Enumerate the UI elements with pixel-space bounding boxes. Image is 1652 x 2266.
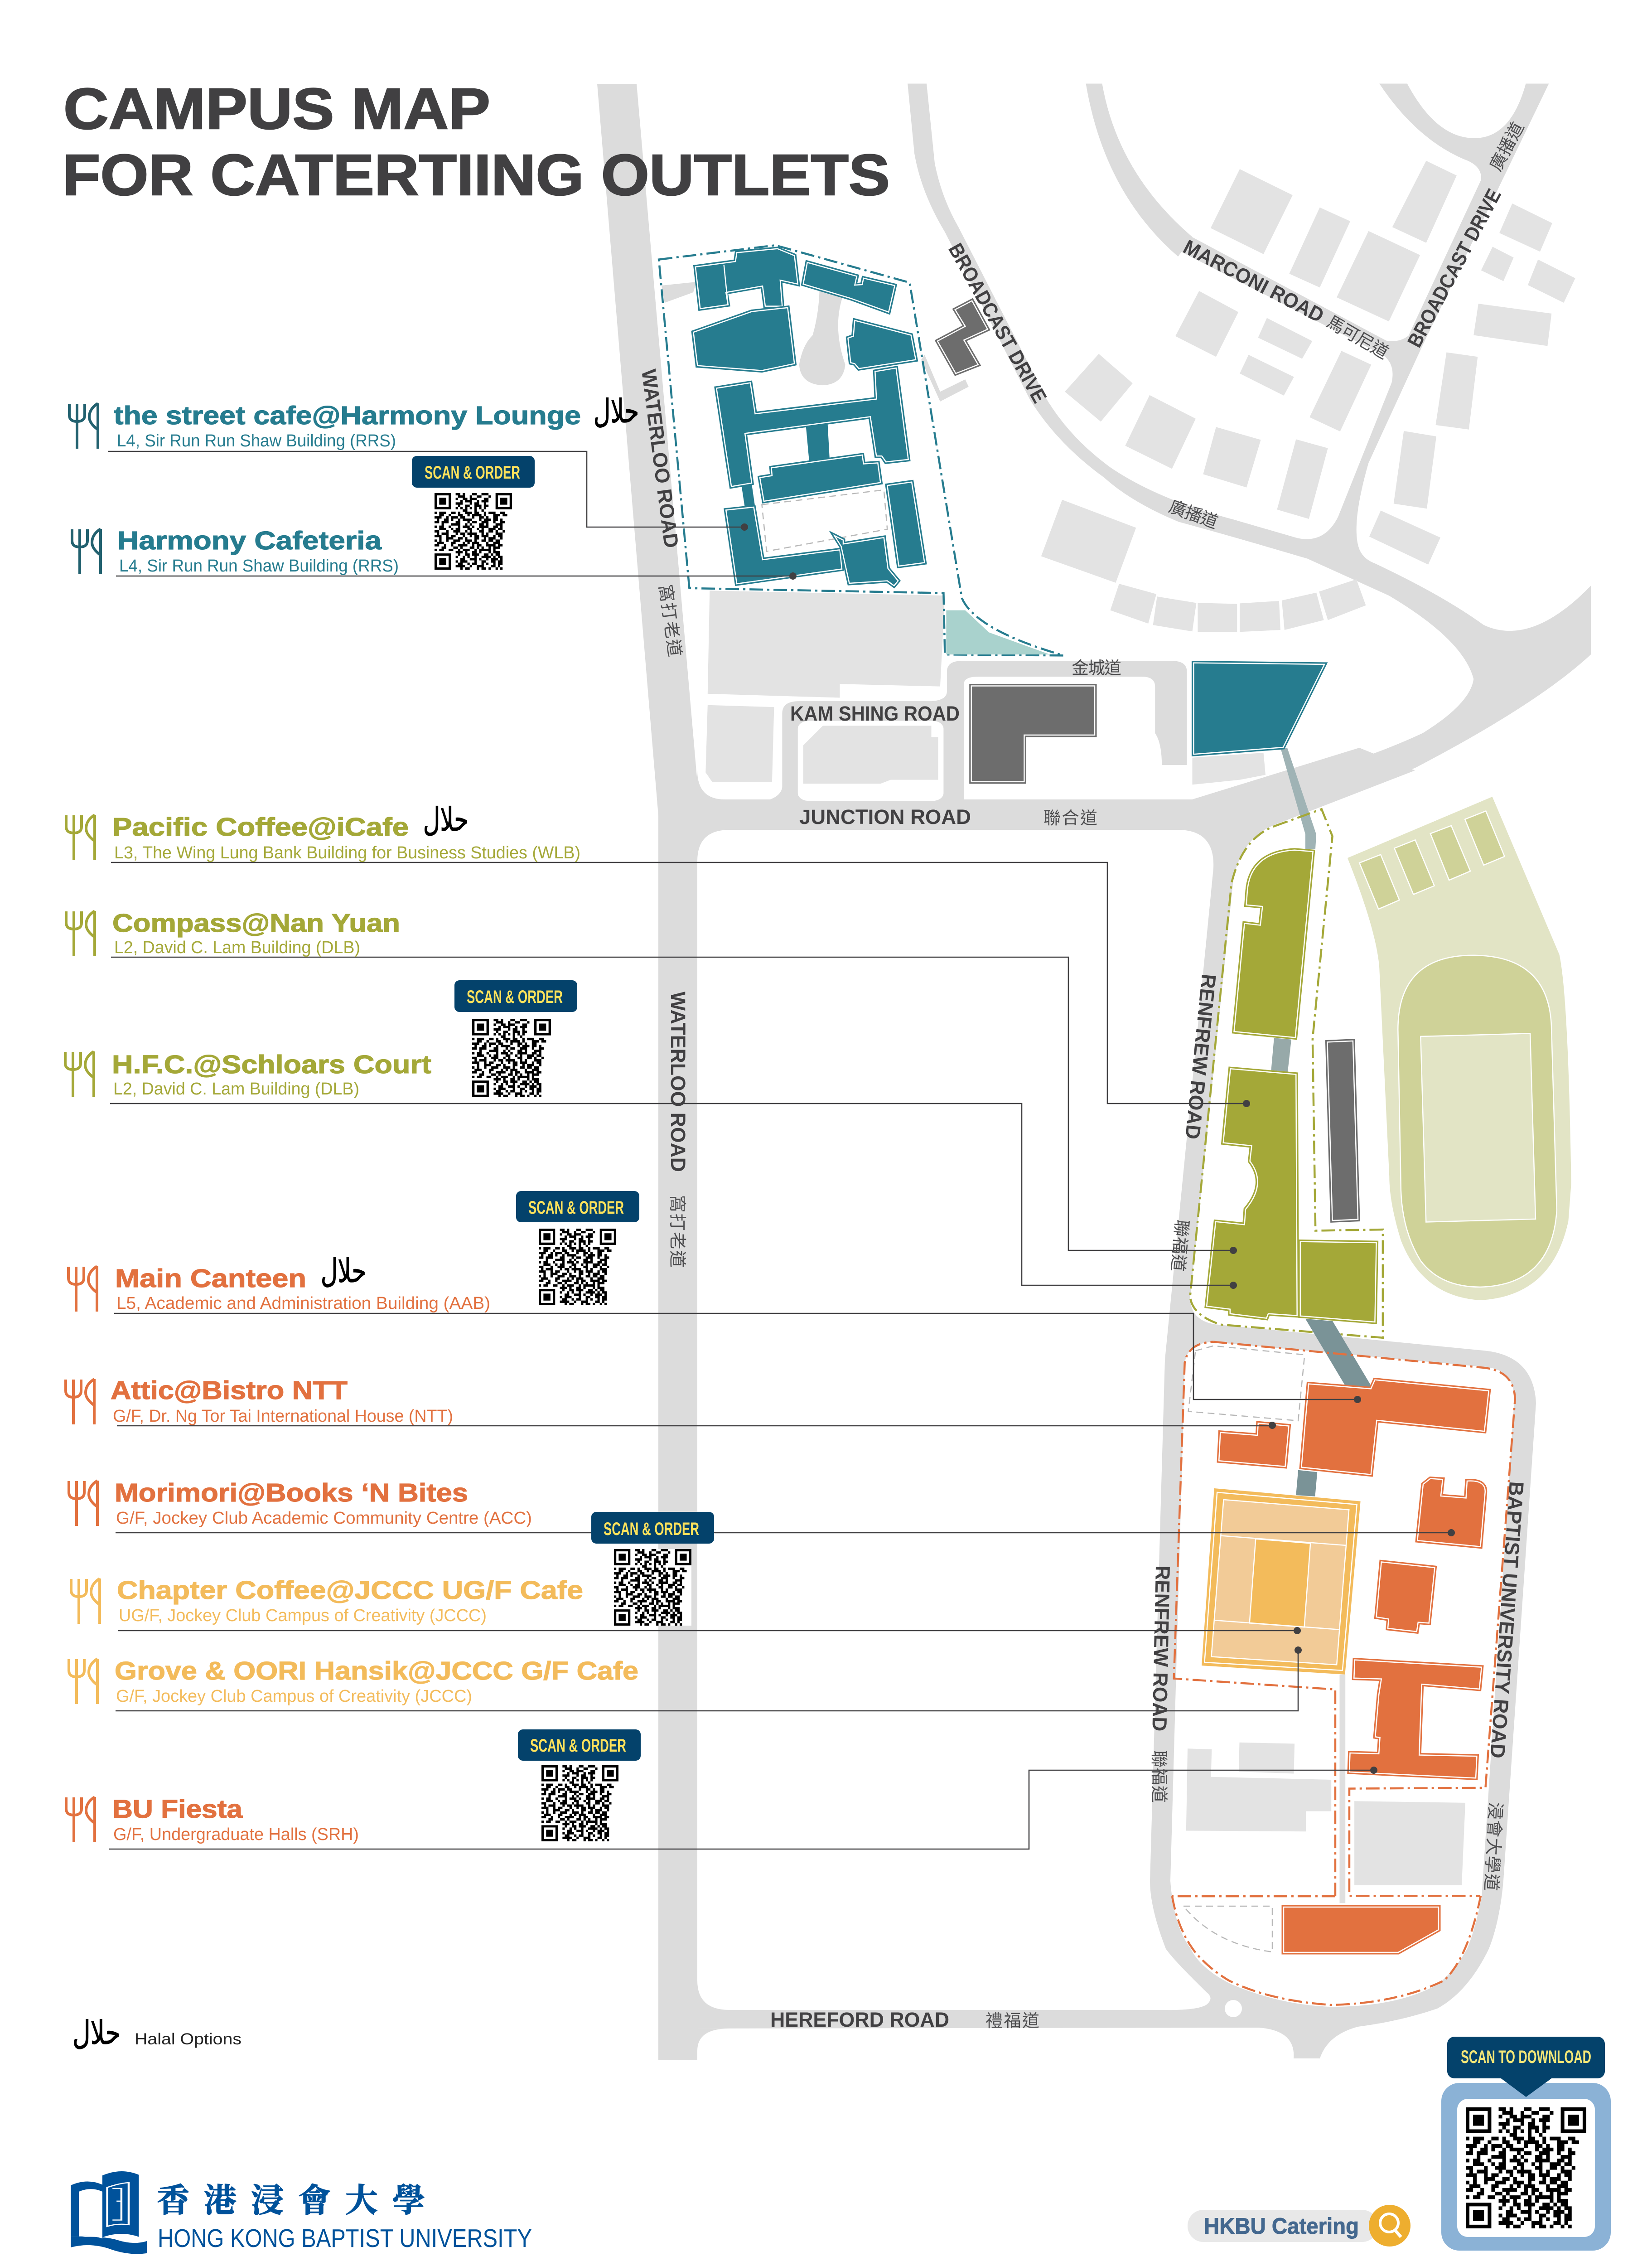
zone: south boundary and south building [1172, 1896, 1481, 2005]
road: corner fillets [697, 770, 729, 2051]
button text: SCAN & ORDER [528, 1198, 624, 1218]
zone boundary [1172, 1342, 1515, 1896]
outlet location: UG/F, Jockey Club Campus of Creativity (JCCC) [119, 1606, 487, 1625]
building: east bar [887, 482, 925, 566]
label: Marconi Road Chinese: 馬可尼道 [1323, 312, 1391, 363]
service lane [1339, 1675, 1345, 1903]
button [412, 456, 535, 488]
icon: fork and knife [69, 403, 98, 449]
outlet name: Harmony Cafeteria [117, 526, 382, 555]
outlet: Chapter Coffee@JCCC UG/F Cafe [71, 1576, 583, 1625]
icon: fork and knife [71, 1578, 100, 1624]
label: Renfrew Road lower Chinese: 聯福道 [1149, 1750, 1168, 1803]
outlet name: Grove & OORI Hansik@JCCC G/F Cafe [115, 1656, 638, 1685]
scan and order: Main Canteen [516, 1191, 639, 1305]
outlet name: Compass@Nan Yuan [112, 909, 400, 938]
leader lines and location dots [108, 451, 1455, 1849]
bridge [1271, 1038, 1291, 1072]
building: north wing [696, 249, 798, 309]
button text: SCAN & ORDER [530, 1736, 626, 1756]
road: Broadcast Drive and Marconi Road [705, 84, 1591, 809]
QR code [614, 1549, 691, 1626]
building: teal Communication block [1193, 663, 1324, 754]
label: Waterloo Road lower: WATERLOO ROAD [667, 992, 690, 1172]
outlet: Grove & OORI Hansik@JCCC G/F Cafe [69, 1656, 638, 1706]
label: Baptist University Road Chinese: 浸會大學道 [1481, 1802, 1505, 1891]
bridge [1296, 1470, 1317, 1496]
outlet: the street cafe@Harmony Lounge [69, 392, 639, 450]
road: Kam Shing white block [798, 721, 943, 801]
book emblem [71, 2171, 147, 2254]
scan and order: Harmony [412, 456, 535, 570]
road: white roundabout island [1225, 2000, 1242, 2017]
label: Marconi Road: MARCONI ROAD [1179, 235, 1328, 327]
legend: halal options [72, 2014, 242, 2052]
leader: Compass [111, 957, 1237, 1254]
scan and order: H.F.C. [454, 980, 577, 1097]
label: Junction Road Chinese: 聯合道 [1043, 809, 1097, 828]
pill [1188, 2210, 1378, 2242]
wave base [71, 2237, 147, 2254]
icon: fork and knife [69, 1659, 97, 1704]
label: Broadcast Drive east: BROADCAST DRIVE [1403, 185, 1506, 351]
outlet location: G/F, Undergraduate Halls (SRH) [113, 1825, 359, 1844]
label: Hereford Road Chinese: 禮福道 [985, 2012, 1039, 2031]
label: Waterloo Road upper: WATERLOO ROAD [637, 368, 683, 549]
building: H-shaped block [716, 368, 908, 486]
building: Harmony L block [726, 507, 842, 584]
road: Junction, Renfrew, Baptist University and Hereford loop [680, 748, 1536, 2058]
icon: fork and knife [66, 911, 95, 956]
pale teal plot [946, 610, 1050, 654]
outlet: Attic@Bistro NTT [66, 1376, 453, 1426]
road network [597, 84, 1591, 2060]
outlet location: L5, Academic and Administration Building (AAB) [116, 1294, 490, 1313]
dashed outline [1188, 1346, 1304, 1421]
outlet name: Morimori@Books ‘N Bites [115, 1478, 468, 1507]
road labels [637, 119, 1528, 2031]
covered bridge to Communication building [1280, 748, 1316, 849]
building fill [1193, 663, 1324, 754]
outlet name: BU Fiesta [112, 1795, 243, 1824]
outlet location: L2, David C. Lam Building (DLB) [114, 938, 360, 957]
leader: Chapter Coffee [118, 1627, 1301, 1634]
QR code [541, 1765, 618, 1841]
label: Broadcast Drive middle Chinese: 廣播道 [1166, 497, 1221, 533]
legend text: Halal Options [135, 2030, 242, 2048]
pill text: HKBU Catering [1204, 2213, 1359, 2239]
zone boundary [1190, 809, 1383, 1338]
label: Waterloo Road upper Chinese: 窩打老道 [655, 583, 684, 658]
building: NTT [1219, 1423, 1289, 1467]
road: campus access driveway [662, 282, 696, 303]
outlet name: Attic@Bistro NTT [111, 1376, 348, 1405]
building: east block [848, 320, 916, 368]
outlet: Main Canteen [68, 1252, 490, 1313]
zone boundary [659, 245, 1063, 655]
building: dark gray bar [1327, 1041, 1358, 1220]
building: south annex [1300, 1242, 1377, 1322]
road: Waterloo Road [597, 84, 697, 2060]
outlet name: Chapter Coffee@JCCC UG/F Cafe [117, 1576, 583, 1605]
surrounding buildings [705, 161, 1575, 784]
building: west block [693, 308, 794, 371]
building: southern block [1284, 1907, 1439, 1952]
tennis courts [1359, 811, 1505, 909]
outlet: Harmony Cafeteria [72, 526, 399, 576]
outlet name: Main Canteen [115, 1264, 306, 1293]
button [516, 1191, 639, 1222]
outlet location: L3, The Wing Lung Bank Building for Business Studies (WLB) [114, 843, 580, 862]
label: Renfrew Road upper: RENFREW ROAD [1181, 973, 1221, 1140]
label: Renfrew Road lower: RENFREW ROAD [1148, 1565, 1174, 1732]
search icon [1369, 2205, 1410, 2247]
inner white line [1204, 1492, 1357, 1670]
label: Waterloo Road lower Chinese: 窩打老道 [667, 1195, 686, 1268]
road: Broadcast Drive, Marconi Road and junction [908, 84, 1591, 809]
connector [742, 484, 755, 508]
outlet name: Pacific Coffee@iCafe [112, 813, 409, 842]
bridge between zones [1305, 1319, 1372, 1387]
label: Junction Road: JUNCTION ROAD [799, 805, 971, 828]
label: Renfrew Road upper Chinese: 聯福道 [1168, 1219, 1191, 1272]
halal mark: حلال [594, 392, 639, 430]
courtyard dashed outline [762, 490, 887, 552]
leader: Main Canteen [114, 1313, 1361, 1403]
card inner [1457, 2099, 1595, 2237]
outlet: Compass@Nan Yuan [66, 909, 400, 957]
button [454, 980, 577, 1012]
building: David C. Lam Building [1207, 1069, 1297, 1318]
building: ACC [1417, 1479, 1485, 1547]
QR code [539, 1229, 616, 1305]
icon: fork and knife [69, 1481, 97, 1526]
building: Academic and Administration Building [1301, 1380, 1489, 1475]
zone: Shaw campus (teal) [659, 245, 1095, 782]
leader: BU Fiesta [109, 1767, 1377, 1849]
label: Broadcast Drive west: BROADCAST DRIVE [944, 239, 1051, 407]
callout tip [1500, 2077, 1553, 2097]
label: Broadcast Drive east Chinese: 廣播道 [1487, 119, 1528, 174]
right page frame [107, 2183, 129, 2226]
light panel [1211, 1500, 1349, 1665]
road: service lane [921, 355, 969, 402]
label: Hereford Road: HEREFORD ROAD [770, 2008, 949, 2031]
button text: SCAN & ORDER [425, 463, 520, 483]
QR code [435, 493, 512, 570]
dark core [1250, 1539, 1310, 1627]
connector [806, 424, 830, 463]
leader: Attic [117, 1422, 1276, 1429]
halal mark: حلال [423, 800, 469, 838]
button [518, 1729, 641, 1761]
outlet location: G/F, Jockey Club Campus of Creativity (JCCC) [116, 1687, 472, 1706]
leader: Harmony Cafeteria [116, 572, 797, 580]
outlet location: G/F, Dr. Ng Tor Tai International House (NTT) [113, 1407, 453, 1426]
icon: fork and knife [72, 529, 101, 574]
building: central block [1377, 1562, 1435, 1632]
leader: H.F.C. [110, 1104, 1237, 1289]
English name: HONG KONG BAPTIST UNIVERSITY [158, 2224, 532, 2253]
building: central bar [760, 455, 880, 501]
sports ground [1348, 797, 1571, 1300]
leader: the street cafe [108, 451, 748, 531]
zone: Shaw and Jockey Club campus (orange) [1172, 1342, 1515, 1903]
leader: Morimori [116, 1529, 1455, 1536]
callout text: SCAN TO DOWNLOAD [1461, 2047, 1591, 2067]
building: dark gray L block [971, 686, 1095, 782]
icon: fork and knife [68, 1266, 97, 1312]
building: south pavilion [835, 536, 898, 586]
HKBU logo [71, 2171, 532, 2254]
leader: Pacific Coffee [111, 862, 1250, 1107]
left page [79, 2189, 102, 2238]
outlet location: G/F, Jockey Club Academic Community Centre (ACC) [116, 1509, 532, 1528]
building: dark gray Broadcast Drive [937, 301, 988, 373]
callout box [1447, 2037, 1605, 2078]
scan and order: BU Fiesta [518, 1729, 641, 1841]
dashed outline [1183, 1906, 1272, 1952]
halal mark: حلال [72, 2014, 121, 2052]
outlet location: L4, Sir Run Run Shaw Building (RRS) [117, 431, 396, 450]
QR code [1466, 2107, 1586, 2228]
building: north wing inner divider [724, 265, 728, 305]
button text: SCAN & ORDER [467, 987, 563, 1007]
icon: fork and knife [66, 815, 95, 860]
light gray buildings [1186, 1743, 1465, 1885]
outlet: Pacific Coffee@iCafe [66, 800, 580, 862]
football field [1420, 1033, 1536, 1222]
card frame [1441, 2083, 1611, 2251]
outlet name: H.F.C.@Schloars Court [112, 1050, 431, 1079]
outlet: H.F.C.@Schloars Court [65, 1050, 431, 1099]
book body [71, 2171, 139, 2237]
title [63, 77, 890, 208]
QR code [472, 1019, 551, 1097]
road: loop interior cutout [1170, 1342, 1514, 2007]
leader: Grove and OORI [116, 1646, 1302, 1711]
label: Kam Shing Road: KAM SHING ROAD [790, 702, 960, 725]
outer yellow base [1202, 1488, 1361, 1675]
HKBU Catering search pill [1188, 2205, 1410, 2247]
button text: SCAN & ORDER [604, 1519, 699, 1539]
title: CAMPUS MAP [63, 77, 490, 141]
separators [1214, 1535, 1346, 1630]
road: Marconi Road western arc [1086, 84, 1192, 257]
halal mark: حلال [321, 1252, 366, 1290]
zone: Ho Sin Hang campus (green) [1190, 797, 1571, 1338]
letter B mark [112, 2189, 121, 2220]
outlet location: L4, Sir Run Run Shaw Building (RRS) [119, 557, 399, 576]
label: Kam Shing Road Chinese: 金城道 [1072, 659, 1121, 678]
road: Kam Shing Road [765, 661, 1187, 802]
icon: fork and knife [66, 1379, 94, 1424]
Chinese name: 香港浸會大學 [157, 2183, 425, 2219]
label: Baptist University Road: BAPTIST UNIVERSITY ROAD [1486, 1481, 1528, 1759]
icon: fork and knife [65, 1051, 94, 1097]
running track [1398, 955, 1557, 1287]
outlet: BU Fiesta [66, 1795, 359, 1844]
building: north block [1234, 850, 1313, 1037]
building: northeast wing [803, 262, 895, 312]
road: teardrop driveway [799, 286, 845, 385]
outlet name: the street cafe@Harmony Lounge [114, 401, 581, 430]
building: Jockey Club Campus of Creativity [1202, 1488, 1361, 1675]
scan and order: JCCC [591, 1512, 714, 1626]
building: Undergraduate Halls H-block [1349, 1660, 1482, 1778]
title: FOR CATERTIING OUTLETS [63, 143, 890, 208]
south zone boundary [1172, 1896, 1481, 2005]
outlet location: L2, David C. Lam Building (DLB) [113, 1080, 359, 1099]
outlet: Morimori@Books 'N Bites [69, 1478, 532, 1528]
download QR card [1441, 2037, 1611, 2251]
icon: fork and knife [66, 1797, 95, 1842]
button [591, 1512, 714, 1544]
